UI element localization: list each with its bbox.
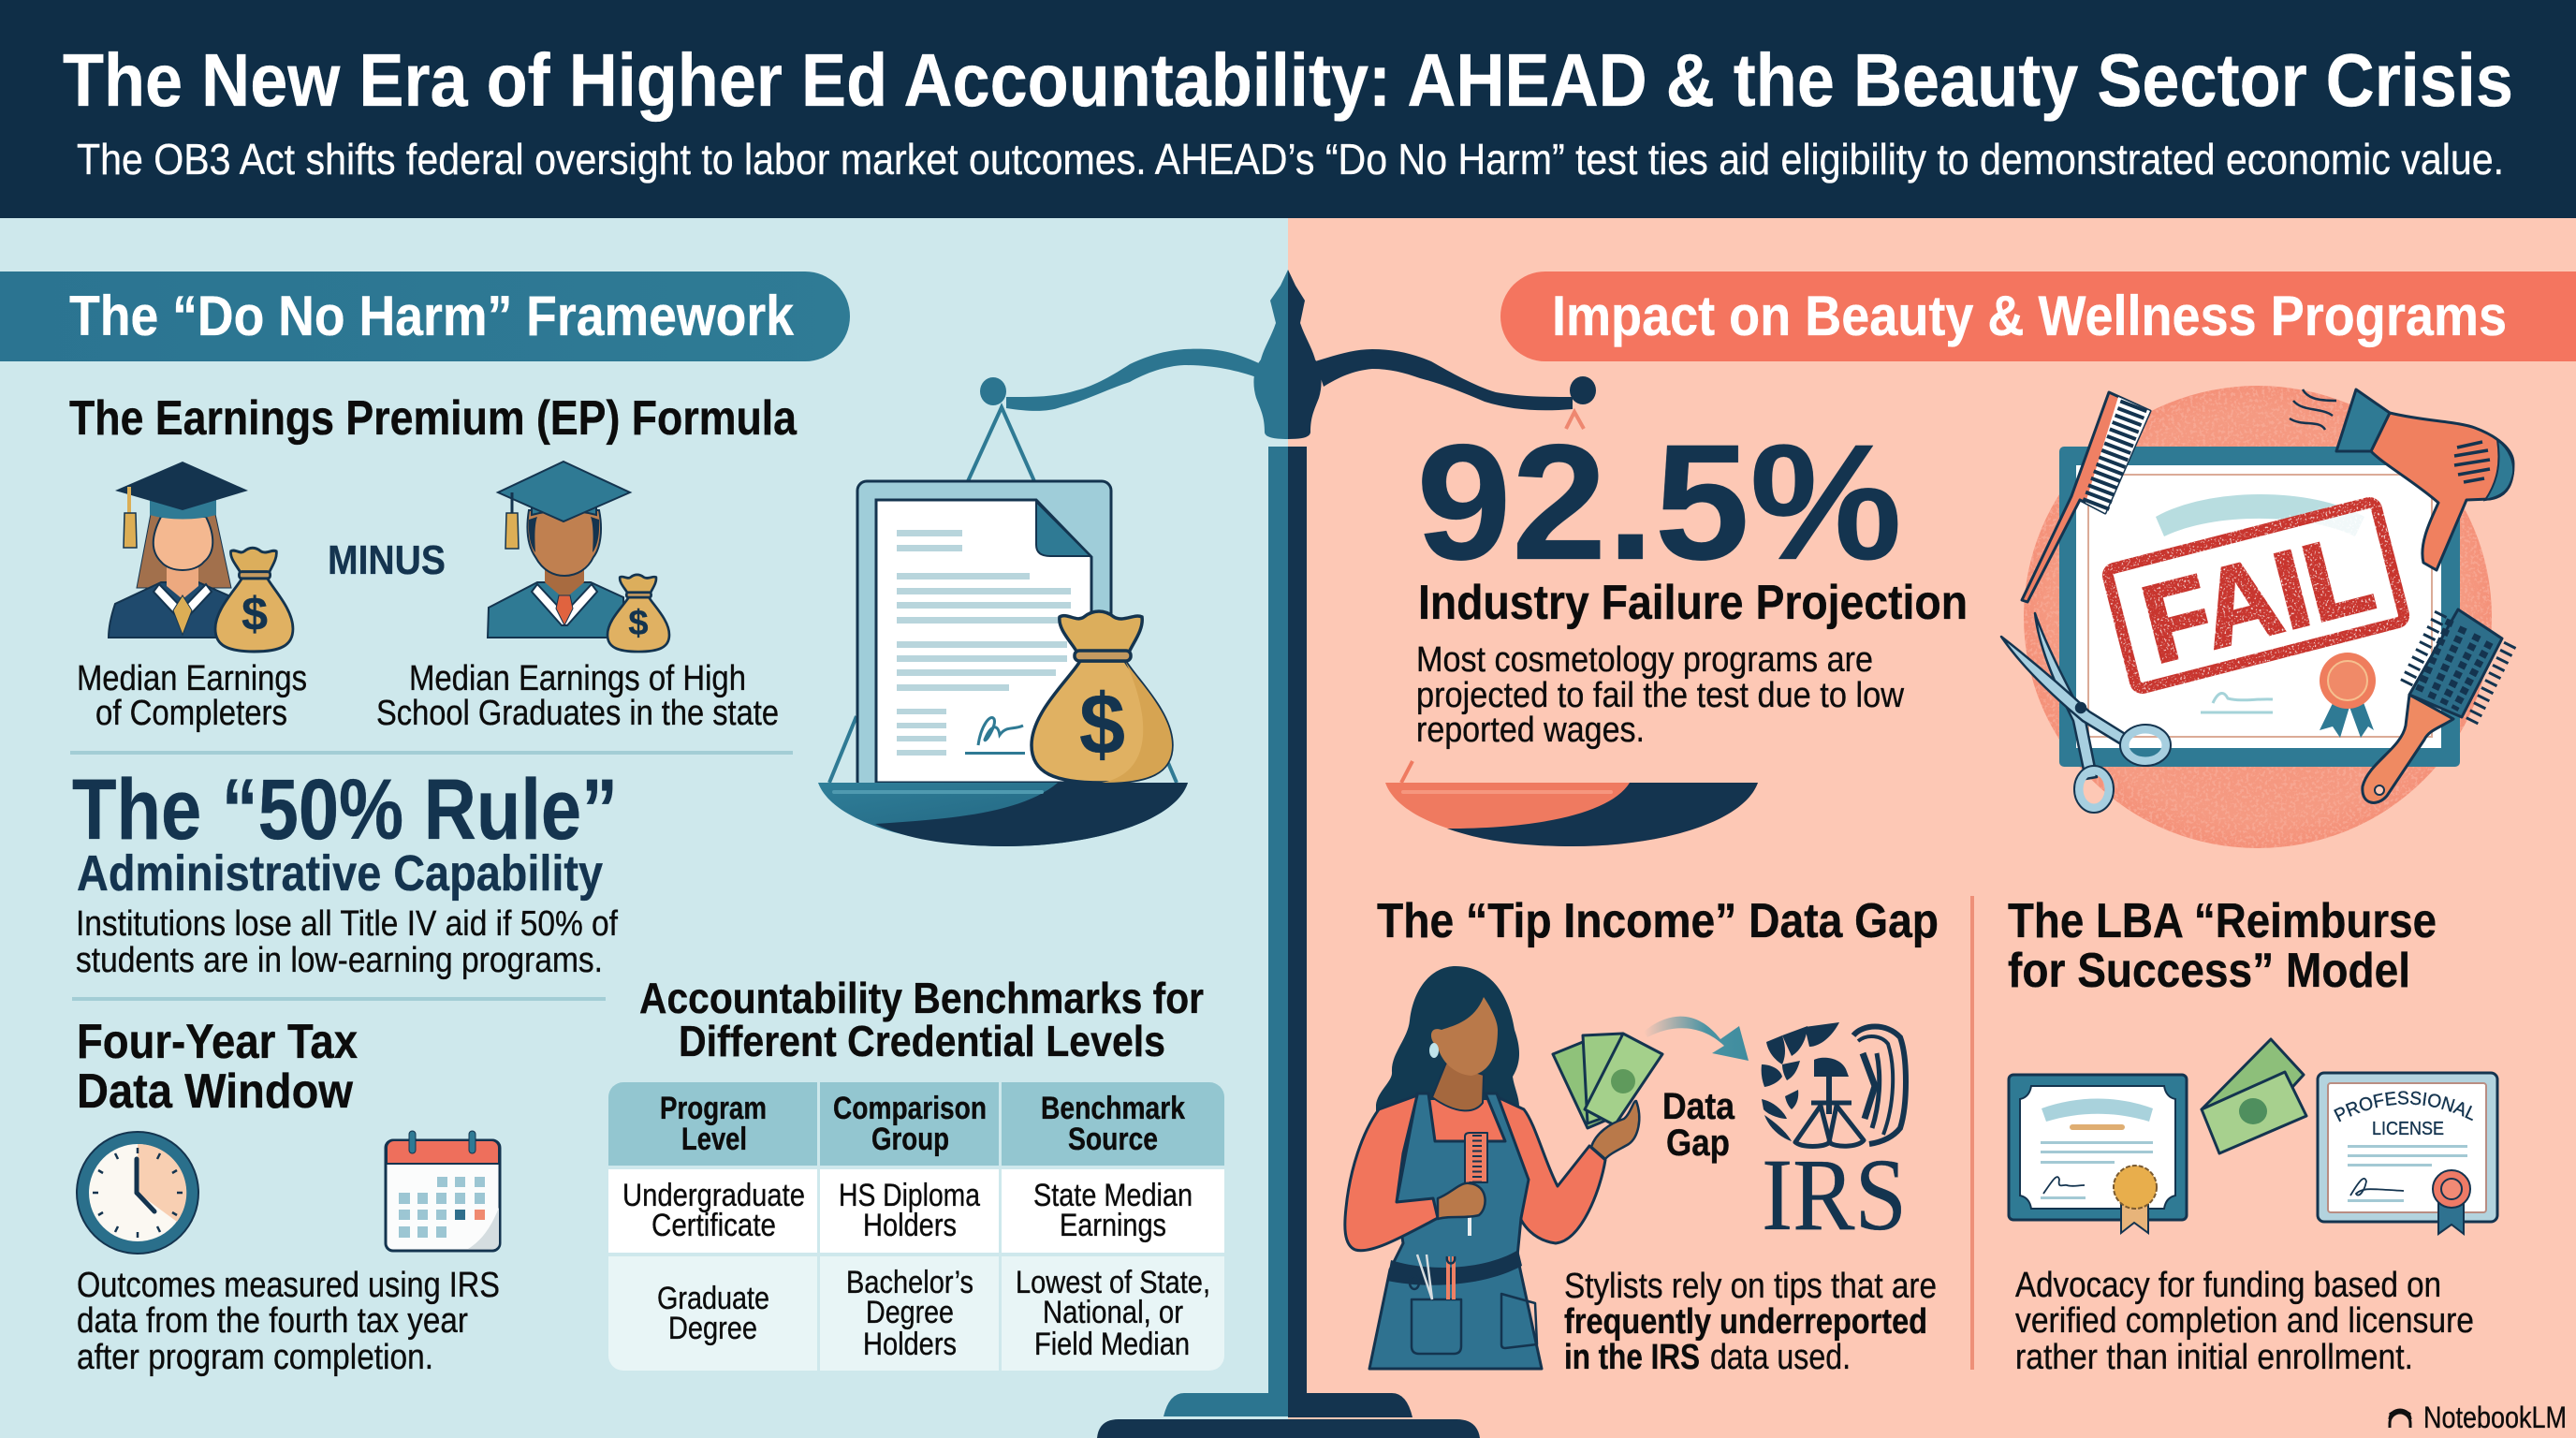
apron bbox=[1369, 1093, 1542, 1369]
eagle head bbox=[1814, 1058, 1849, 1077]
ribbon banner bbox=[2156, 494, 2364, 536]
signature bbox=[2201, 694, 2273, 712]
heading: LBA Reimburse for Success: for Success” Model bbox=[2008, 944, 2410, 998]
laurel leaves bbox=[1762, 1022, 1839, 1141]
table row: undergraduate certificate: Earnings bbox=[1060, 1208, 1166, 1243]
shirt left arm bbox=[1345, 1095, 1438, 1251]
icon: money bag smaller bbox=[607, 575, 669, 652]
icon: female graduate with money bag: $ bbox=[242, 588, 268, 640]
text: advocacy for funding: rather than initial enrollment. bbox=[2015, 1338, 2413, 1377]
text: cosmetology programs bbox=[1416, 640, 1904, 750]
tablet frame bbox=[857, 481, 1111, 790]
text: Title IV aid bbox=[76, 904, 618, 980]
seal bbox=[2320, 653, 2376, 738]
logo: IRS eagle seal bbox=[1762, 1022, 1906, 1146]
icon: calendar bbox=[386, 1131, 500, 1251]
text: Median Earnings of Completers: of Completers bbox=[95, 694, 287, 733]
subheading: Administrative Capability: Administrative Capability bbox=[77, 845, 603, 902]
text: Median Earnings of Completers: Median Earnings bbox=[77, 659, 307, 698]
heading: Accountability Benchmarks bbox=[639, 974, 1204, 1065]
right hand bbox=[1591, 1101, 1639, 1159]
icon: document and money bag on left pan bbox=[818, 407, 1188, 846]
table row: graduate degree: Graduate bbox=[657, 1281, 769, 1316]
arrow: cash to IRS bbox=[1644, 1017, 1749, 1061]
table row: graduate degree: Degree bbox=[866, 1295, 954, 1330]
document bbox=[876, 500, 1091, 783]
icon: male graduate with money bag bbox=[488, 462, 669, 652]
comb held bbox=[1465, 1133, 1487, 1187]
apron pockets bbox=[1412, 1294, 1537, 1354]
earring bbox=[1429, 1043, 1439, 1058]
text: Title IV aid: Institutions lose all Title IV aid if 50% of bbox=[76, 904, 618, 944]
table row: undergraduate certificate: Undergraduate bbox=[622, 1178, 805, 1213]
base upper right bbox=[1288, 1393, 1412, 1417]
shield stripes bbox=[1853, 1026, 1906, 1144]
table row: undergraduate certificate: Certificate bbox=[651, 1208, 776, 1243]
certificate paper bbox=[2076, 465, 2441, 748]
icon: professional license: PROFESSIONAL bbox=[2334, 1091, 2473, 1122]
icon: professional license bbox=[2316, 1071, 2499, 1236]
section banner: Do No Harm Framework bbox=[0, 271, 850, 361]
finial left half bbox=[1253, 270, 1288, 439]
stat: 92.5%: 92.5% bbox=[1416, 411, 1902, 594]
pillar bbox=[1268, 447, 1288, 1401]
icon: hair dryer bbox=[2290, 389, 2513, 570]
icon: clock bbox=[77, 1132, 198, 1254]
text: stylists rely on tips: frequently underreported bbox=[1564, 1302, 1927, 1342]
strings left pan bbox=[829, 407, 1177, 783]
certificate frame bbox=[2059, 447, 2460, 767]
text: outcomes measured: after program completion. bbox=[77, 1338, 433, 1377]
heading: Four-Year Tax Data Window: Data Window bbox=[77, 1064, 353, 1119]
table row: graduate degree: Degree bbox=[668, 1311, 757, 1346]
heading: Accountability Benchmarks: Accountability Benchmarks for bbox=[639, 974, 1204, 1022]
icon: money bag large: $ bbox=[1079, 677, 1125, 772]
table row: undergraduate certificate: Holders bbox=[863, 1208, 957, 1243]
tools in pocket bbox=[1410, 1255, 1455, 1299]
text: stylists rely on tips bbox=[1564, 1267, 1937, 1377]
text: advocacy for funding: verified completion and licensure bbox=[2015, 1301, 2474, 1341]
shirt torso bbox=[1404, 1100, 1524, 1161]
base upper bbox=[1164, 1393, 1288, 1416]
text: outcomes measured: Outcomes measured using IRS bbox=[77, 1266, 500, 1305]
apron belt bbox=[1387, 1250, 1522, 1285]
left beam ball bbox=[980, 377, 1006, 405]
text: Median Earnings of High School Graduates bbox=[376, 659, 779, 733]
heading: Tip Income Data Gap: The “Tip Income” Data Gap bbox=[1377, 894, 1939, 948]
table: benchmarks bbox=[608, 1082, 1224, 1371]
left hand bbox=[1438, 1183, 1486, 1219]
illustration: FAIL certificate with beauty tools bbox=[2001, 386, 2513, 848]
left beam bbox=[1006, 349, 1259, 411]
text: Median Earnings of High School Graduates: School Graduates in the state bbox=[376, 694, 779, 733]
heading: LBA Reimburse for Success: The LBA “Reimburse bbox=[2008, 894, 2437, 948]
right pan string caret bbox=[1566, 412, 1584, 429]
right beam ball bbox=[1570, 376, 1596, 404]
label: Data Gap bbox=[1662, 1086, 1735, 1164]
text: cosmetology programs: Most cosmetology programs are bbox=[1416, 640, 1873, 680]
table header row bbox=[660, 1091, 1185, 1157]
hair bbox=[1376, 966, 1519, 1119]
heading: Earnings Premium Formula: The Earnings Premium (EP) Formula bbox=[69, 391, 798, 446]
heading: Four-Year Tax Data Window: Four-Year Tax bbox=[77, 1015, 358, 1069]
icon: money bag large bbox=[1032, 611, 1172, 783]
table header row: Source bbox=[1068, 1122, 1158, 1157]
scale: central pillar and beam bbox=[980, 270, 1596, 1438]
heading: Industry Failure Projection: Industry Failure Projection bbox=[1418, 576, 1968, 630]
icon: male graduate with money bag: $ bbox=[628, 604, 649, 643]
text: Median Earnings of Completers bbox=[77, 659, 307, 733]
FAIL stamp: FAIL bbox=[2130, 510, 2385, 687]
table header row: Benchmark bbox=[1041, 1091, 1185, 1126]
table header row: Program bbox=[660, 1091, 767, 1126]
right beam bbox=[1315, 349, 1573, 410]
heading: LBA Reimburse for Success bbox=[2008, 894, 2437, 998]
table row: graduate degree: National, or bbox=[1043, 1295, 1183, 1330]
left scale pan bbox=[818, 783, 1188, 846]
text: stylists rely on tips: in the IRS bbox=[1564, 1338, 1700, 1377]
header band bbox=[0, 0, 2576, 218]
label: Data Gap: Gap bbox=[1666, 1123, 1730, 1164]
table header row: Comparison bbox=[833, 1091, 987, 1126]
icon: completion certificate bbox=[2009, 1075, 2187, 1233]
table header row: Group bbox=[871, 1122, 949, 1157]
text: cosmetology programs: projected to fail the test due to low bbox=[1416, 676, 1904, 715]
text: stylists rely on tips: Stylists rely on tips that are bbox=[1564, 1267, 1937, 1306]
table row: graduate degree: Bachelor’s bbox=[846, 1265, 973, 1300]
table row: graduate degree: Holders bbox=[863, 1327, 957, 1362]
heading: Accountability Benchmarks: Different Credential Levels bbox=[679, 1017, 1165, 1065]
icon: dollar bills bbox=[2202, 1039, 2306, 1153]
icon: comb bbox=[2022, 392, 2150, 602]
table row: undergraduate certificate bbox=[622, 1178, 1193, 1243]
cash fan bbox=[1553, 1034, 1662, 1128]
table row: undergraduate certificate: State Median bbox=[1033, 1178, 1193, 1213]
section banner: Do No Harm Framework: The “Do No Harm” Framework bbox=[69, 285, 795, 347]
table row: undergraduate certificate: HS Diploma bbox=[839, 1178, 980, 1213]
section banner: Impact on Beauty and Wellness bbox=[1500, 271, 2576, 361]
text: stylists rely on tips: data used. bbox=[1710, 1338, 1851, 1377]
table row: graduate degree: Field Median bbox=[1034, 1327, 1190, 1362]
illustration: stylist holding cash and comb bbox=[1345, 966, 1662, 1369]
right scale pan bbox=[1385, 412, 1758, 846]
text: advocacy for funding: Advocacy for funding based on bbox=[2015, 1266, 2441, 1305]
heading: The 50% Rule: The “50% Rule” bbox=[72, 762, 618, 858]
scale beam and pans bbox=[1795, 1103, 1864, 1146]
text: outcomes measured bbox=[77, 1266, 500, 1377]
base lower bbox=[1097, 1419, 1480, 1438]
text: cosmetology programs: reported wages. bbox=[1416, 711, 1645, 750]
icon: female graduate with money bag bbox=[109, 462, 293, 652]
neck bbox=[1432, 1063, 1484, 1110]
table header row: Level bbox=[681, 1122, 747, 1157]
table row: graduate degree bbox=[658, 1269, 1208, 1356]
text: Title IV aid: students are in low-earning programs. bbox=[76, 941, 603, 980]
icon: round brush bbox=[2363, 609, 2510, 802]
background: left panel bbox=[0, 218, 1288, 1438]
scale post bbox=[1826, 1067, 1832, 1114]
icon: scissors bbox=[2001, 613, 2171, 813]
table row: graduate degree: Lowest of State, bbox=[1016, 1265, 1210, 1300]
face bbox=[1431, 997, 1498, 1076]
text: outcomes measured: data from the fourth tax year bbox=[77, 1301, 468, 1341]
logo: IRS wordmark: IRS bbox=[1762, 1137, 1907, 1252]
icon: professional license: LICENSE bbox=[2372, 1119, 2444, 1139]
text: Median Earnings of High School Graduates: Median Earnings of High bbox=[409, 659, 746, 698]
shirt right arm bbox=[1498, 1097, 1605, 1243]
label: Data Gap: Data bbox=[1662, 1086, 1735, 1127]
heading: Four-Year Tax Data Window bbox=[77, 1015, 358, 1119]
finial right half bbox=[1288, 270, 1322, 439]
text: advocacy for funding bbox=[2015, 1266, 2474, 1377]
icon: money bag small bbox=[215, 548, 293, 652]
background: right panel bbox=[1288, 218, 2576, 1438]
label: MINUS: MINUS bbox=[328, 537, 446, 583]
